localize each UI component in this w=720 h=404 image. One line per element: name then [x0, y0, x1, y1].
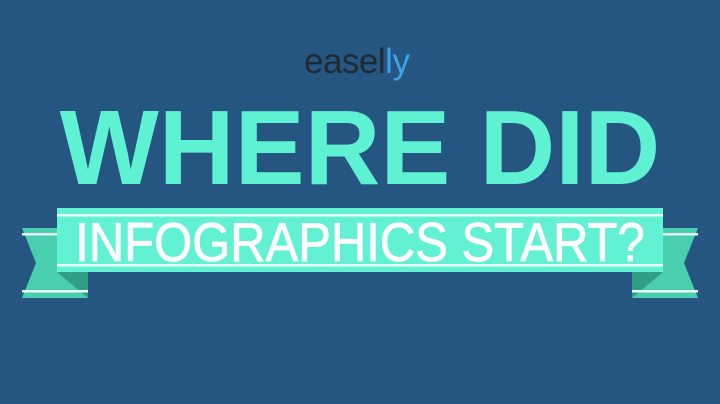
title: WHERE DID: WHERE DID [60, 89, 660, 207]
ribbon tail right [632, 228, 698, 298]
banner main [57, 208, 663, 272]
subtitle: INFOGRAPHICS START?: INFOGRAPHICS START? [75, 211, 645, 273]
ribbon tail left [22, 228, 88, 298]
logo: easelly: easelly [304, 42, 409, 81]
